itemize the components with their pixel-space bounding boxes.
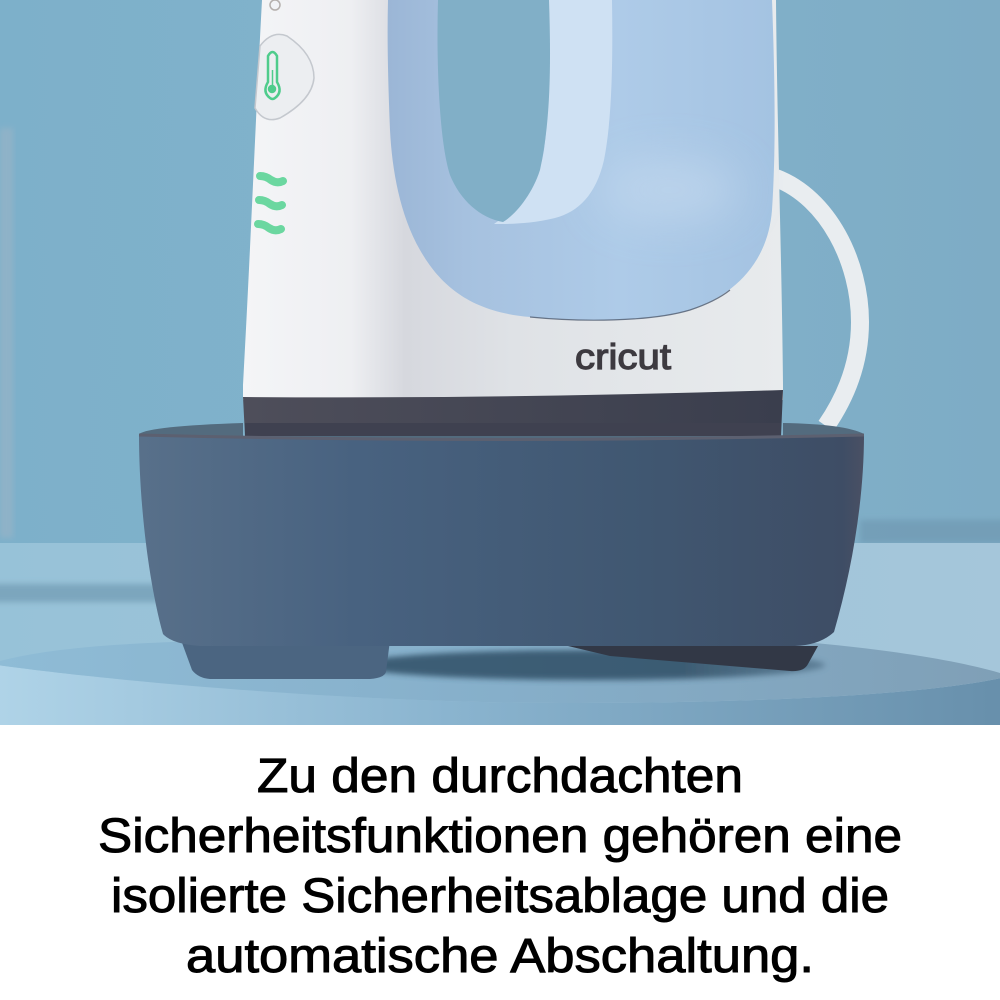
tray right foot <box>568 646 818 671</box>
handle lower edge <box>530 290 730 320</box>
iron soleplate band <box>243 390 783 436</box>
caption line 4: automatische Abschaltung. <box>186 930 814 983</box>
caption <box>98 750 902 983</box>
safety tray <box>139 423 864 679</box>
tray inner rim <box>139 423 864 440</box>
photo background: table surface <box>0 543 1000 725</box>
temperature button <box>255 34 314 120</box>
handle opening <box>438 0 550 222</box>
caption line 3: isolierte Sicherheitsablage und die <box>111 870 889 923</box>
photo background: wall <box>0 0 1000 725</box>
round pedestal <box>0 640 1000 725</box>
handle <box>388 0 775 320</box>
iron <box>243 0 783 436</box>
pedestal top face <box>0 640 1000 703</box>
tray soleplate overlap <box>245 423 781 436</box>
tray rim line <box>139 435 864 440</box>
tray body <box>139 434 864 646</box>
caption line 1: Zu den durchdachten <box>257 750 743 803</box>
handle inner surface <box>494 0 612 224</box>
icon: thermometer <box>265 52 280 99</box>
tray left foot <box>181 640 390 679</box>
power cord <box>776 178 860 426</box>
icon: steam waves <box>258 176 283 230</box>
caption line 2: Sicherheitsfunktionen gehören eine <box>98 810 902 863</box>
iron body <box>243 0 783 400</box>
logo: cricut: cricut <box>575 336 671 377</box>
handle highlight <box>600 160 740 220</box>
tray shadow <box>355 650 825 680</box>
pedestal side <box>0 664 1000 725</box>
icon: power indicator <box>270 0 280 10</box>
